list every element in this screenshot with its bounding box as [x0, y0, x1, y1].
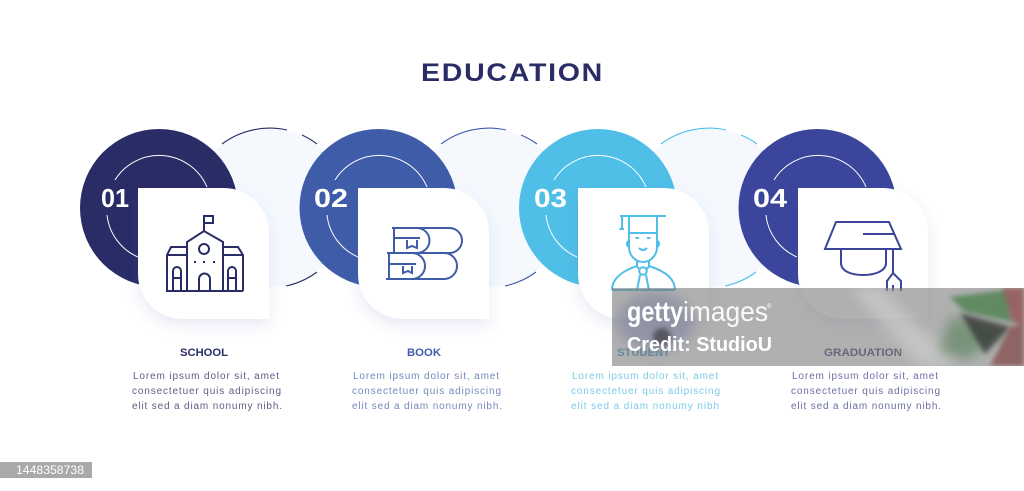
description: graduation — [791, 371, 941, 412]
title: EDUCATION — [421, 59, 604, 87]
label: graduation: GRADUATION — [824, 347, 902, 359]
description: student — [571, 371, 720, 412]
label: book: BOOK — [407, 347, 441, 359]
description: book — [352, 371, 502, 412]
card 03 — [578, 188, 709, 319]
watermark credit: Credit: StudioU — [627, 334, 772, 356]
number 04: 04 — [753, 183, 788, 213]
ring 01 — [107, 155, 207, 257]
image id tag: 1448358738 — [16, 465, 84, 477]
circle 03 — [519, 129, 677, 287]
description: school: consectetuer quis adipiscing — [132, 386, 281, 397]
watermark banner — [612, 288, 1024, 366]
description: book: consectetuer quis adipiscing — [352, 386, 501, 397]
circle 04 — [738, 129, 896, 287]
description: school: Lorem ipsum dolor sit, amet — [133, 371, 279, 382]
description: book: Lorem ipsum dolor sit, amet — [353, 371, 499, 382]
card 02 — [358, 188, 489, 319]
ring 02 — [327, 155, 427, 257]
circle 01 — [80, 129, 238, 287]
circle 02 — [300, 129, 458, 287]
icon: books — [386, 228, 462, 279]
ring 03 — [546, 155, 646, 257]
description: book: elit sed a diam nonumy nibh. — [352, 401, 502, 412]
description: school: elit sed a diam nonumy nibh. — [132, 401, 282, 412]
description: student: Lorem ipsum dolor sit, amet — [572, 371, 718, 382]
icon: graduation cap — [825, 222, 901, 291]
watermark logo — [627, 296, 772, 327]
card 01 — [138, 188, 269, 319]
connector circle 2-3 — [410, 128, 568, 287]
description: school — [132, 371, 282, 412]
watermark logo: ® — [767, 303, 772, 310]
description: student: consectetuer quis adipiscing — [571, 386, 720, 397]
number 03: 03 — [534, 183, 567, 213]
description: graduation: consectetuer quis adipiscing — [791, 386, 940, 397]
description: student: elit sed a diam nonumy nibh — [571, 401, 719, 412]
watermark logo: images — [683, 296, 768, 327]
number 01: 01 — [101, 183, 129, 213]
description: graduation: elit sed a diam nonumy nibh. — [791, 401, 941, 412]
connector circle 3-4 — [630, 128, 788, 287]
label: student: STUDENT — [617, 347, 670, 359]
description: graduation: Lorem ipsum dolor sit, amet — [792, 371, 938, 382]
number 02: 02 — [314, 183, 348, 213]
icon: school building — [166, 216, 243, 291]
banner overlay — [612, 288, 1024, 366]
watermark logo: getty — [627, 296, 683, 327]
label: school: SCHOOL — [180, 347, 228, 359]
step 01: school — [80, 129, 282, 412]
connector circle 1-2 — [190, 128, 348, 287]
icon: student — [612, 216, 675, 290]
step 04: graduation — [738, 129, 941, 412]
card 04 — [798, 188, 928, 319]
step 03: student — [519, 129, 720, 412]
image id tag — [0, 462, 92, 478]
step 02: book — [300, 129, 502, 412]
ring 04 — [766, 155, 866, 257]
